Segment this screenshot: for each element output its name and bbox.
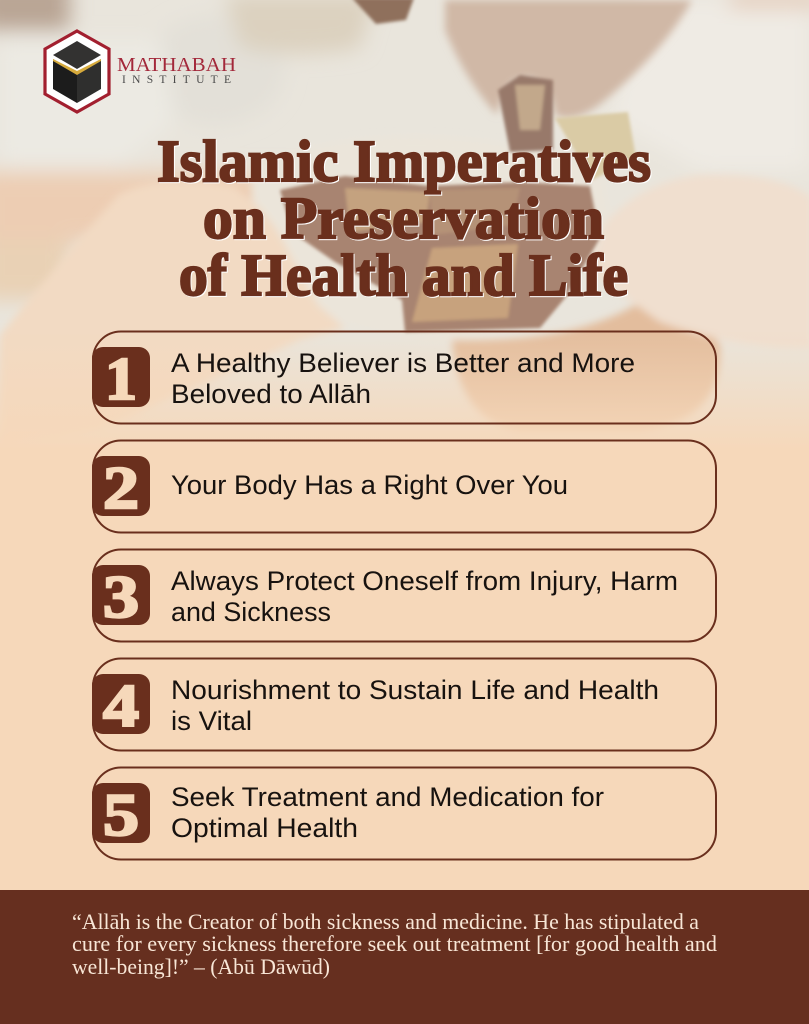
item 1 text: A Healthy Believer is Better and More bbox=[171, 348, 635, 378]
held date top bbox=[352, 0, 414, 24]
right hand bbox=[590, 175, 809, 348]
title: Islamic Imperatives bbox=[157, 128, 651, 194]
quote text: “Allāh is the Creator of both sickness and medicine. He has stipulated a bbox=[72, 909, 699, 934]
panel: item 1 bbox=[92, 332, 716, 424]
panel: item 5 bbox=[92, 768, 716, 860]
quote text: cure for every sickness therefore seek out treatment [for good health and bbox=[72, 931, 717, 956]
item 3 text: and Sickness bbox=[171, 597, 331, 627]
item 5 text bbox=[171, 782, 604, 843]
item 5 text: Optimal Health bbox=[171, 813, 358, 843]
number badge 2: 2 bbox=[103, 455, 139, 521]
number badge 3: 3 bbox=[103, 564, 139, 630]
panel: item 4 bbox=[92, 658, 716, 750]
title: of Health and Life bbox=[179, 242, 628, 308]
item 4 text: Nourishment to Sustain Life and Health bbox=[171, 675, 659, 705]
title bbox=[157, 128, 652, 309]
left hand bbox=[0, 181, 345, 445]
item 3 text: Always Protect Oneself from Injury, Harm bbox=[171, 566, 678, 596]
bowl bbox=[250, 136, 612, 340]
logo wordmark: MATHABAH bbox=[117, 54, 236, 76]
item 4 text: is Vital bbox=[171, 706, 252, 736]
dates in bowl bbox=[280, 176, 600, 332]
number badge 5 bbox=[92, 782, 150, 848]
item 1 text bbox=[171, 348, 635, 409]
item 1 text: Beloved to Allāh bbox=[171, 379, 371, 409]
title: on Preservation bbox=[203, 185, 604, 251]
upper hand fingers bbox=[445, 0, 692, 118]
panel: footer quote bbox=[0, 890, 809, 1024]
title: on Preservation bbox=[204, 186, 605, 252]
number badge 4 bbox=[92, 673, 150, 739]
lower bowl shadow bbox=[452, 280, 720, 432]
number badge 1 bbox=[92, 346, 150, 412]
icon: Kaaba hexagon bbox=[45, 31, 109, 112]
item 5 text: Seek Treatment and Medication for bbox=[171, 782, 604, 812]
quote text bbox=[72, 909, 717, 979]
title: Islamic Imperatives bbox=[158, 129, 652, 195]
number badge 3 bbox=[92, 564, 150, 630]
date held between fingers bbox=[498, 75, 553, 152]
number badge 1: 1 bbox=[105, 346, 137, 412]
number badge 5: 5 bbox=[103, 782, 139, 848]
item 3 text bbox=[171, 566, 678, 627]
title: of Health and Life bbox=[180, 243, 629, 309]
logo bbox=[45, 31, 236, 112]
item 2 text: Your Body Has a Right Over You bbox=[171, 470, 568, 500]
panel: item 2 bbox=[92, 440, 716, 532]
quote text: well-being]!” – (Abū Dāwūd) bbox=[72, 954, 330, 979]
number badge 2 bbox=[92, 455, 150, 521]
logo subtitle: INSTITUTE bbox=[122, 74, 231, 86]
panel: item 3 bbox=[92, 550, 716, 642]
number badge 4: 4 bbox=[103, 673, 139, 739]
item 4 text bbox=[171, 675, 659, 736]
